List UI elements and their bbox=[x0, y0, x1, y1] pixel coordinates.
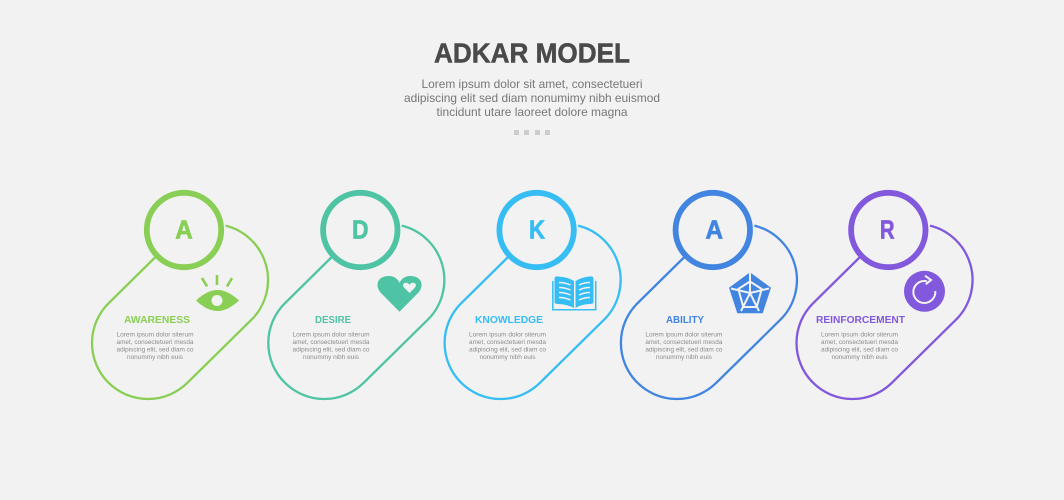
description: Lorem ipsum dolor siterum bbox=[469, 332, 546, 338]
panel: awareness bbox=[92, 193, 268, 399]
icon: radar pentagon bbox=[729, 272, 771, 313]
heading: AWARENESS bbox=[124, 314, 190, 326]
outline bbox=[92, 226, 268, 399]
subtitle: tincidunt utare laoreet dolore magna bbox=[436, 105, 628, 119]
letter circle bbox=[499, 193, 574, 267]
icon: eye bbox=[196, 275, 239, 311]
letter circle bbox=[323, 193, 397, 267]
outline bbox=[621, 226, 797, 399]
description: adipiscing elit, sed diam co bbox=[292, 346, 370, 354]
description: nonummy nibh euis bbox=[480, 354, 536, 361]
description: adipiscing elit, sed diam co bbox=[821, 346, 898, 354]
description: amet, consectetueri mesda bbox=[469, 339, 546, 346]
heading: ABILITY bbox=[666, 314, 704, 326]
subtitle: Lorem ipsum dolor sit amet, consectetueri bbox=[422, 77, 642, 91]
title: ADKAR MODEL bbox=[434, 38, 630, 68]
description: Lorem ipsum dolor siterum bbox=[645, 332, 722, 338]
panel: desire bbox=[268, 193, 444, 399]
letter: D bbox=[352, 214, 369, 244]
description: amet, consectetueri mesda bbox=[821, 339, 898, 346]
letter circle bbox=[851, 193, 926, 267]
description: amet, consectetueri mesda bbox=[292, 339, 370, 346]
heading: DESIRE bbox=[315, 314, 351, 326]
description: amet, consectetueri mesda bbox=[116, 339, 194, 346]
description bbox=[292, 332, 370, 361]
description: amet, consectetueri mesda bbox=[645, 339, 723, 346]
description bbox=[116, 332, 194, 361]
description: adipiscing elit, sed diam co bbox=[469, 346, 546, 354]
outline bbox=[268, 226, 444, 399]
description: adipiscing elit, sed diam co bbox=[116, 346, 194, 354]
heading: REINFORCEMENT bbox=[816, 314, 906, 326]
letter circle bbox=[676, 193, 750, 267]
description: Lorem ipsum dolor siterum bbox=[292, 332, 370, 338]
header bbox=[404, 38, 660, 135]
outline bbox=[796, 226, 973, 399]
panel: reinforcement bbox=[796, 193, 973, 399]
description: Lorem ipsum dolor siterum bbox=[821, 332, 898, 338]
description: nonummy nibh euis bbox=[303, 354, 359, 361]
subtitle bbox=[404, 77, 660, 119]
subtitle: adipiscing elit sed diam nonumimy nibh euismod bbox=[404, 91, 660, 105]
letter: K bbox=[529, 214, 545, 244]
description: adipiscing elit, sed diam co bbox=[645, 346, 723, 354]
outline bbox=[445, 226, 621, 399]
description: nonummy nibh euis bbox=[656, 354, 712, 361]
panel: ability bbox=[621, 193, 797, 399]
description bbox=[469, 332, 546, 361]
icon: refresh bbox=[904, 271, 945, 312]
icon: heart bbox=[377, 276, 422, 312]
icon: book bbox=[553, 276, 596, 310]
letter circle bbox=[147, 193, 221, 267]
letter: R bbox=[880, 214, 895, 244]
description: Lorem ipsum dolor siterum bbox=[116, 332, 194, 338]
dots bbox=[514, 130, 550, 135]
description: nonummy nibh euis bbox=[832, 354, 888, 361]
description bbox=[821, 332, 898, 361]
description: nonummy nibh euis bbox=[127, 354, 183, 361]
letter: A bbox=[175, 214, 193, 244]
letter: A bbox=[706, 214, 723, 244]
description bbox=[645, 332, 723, 361]
heading: KNOWLEDGE bbox=[475, 314, 543, 326]
panel: knowledge bbox=[445, 193, 621, 399]
